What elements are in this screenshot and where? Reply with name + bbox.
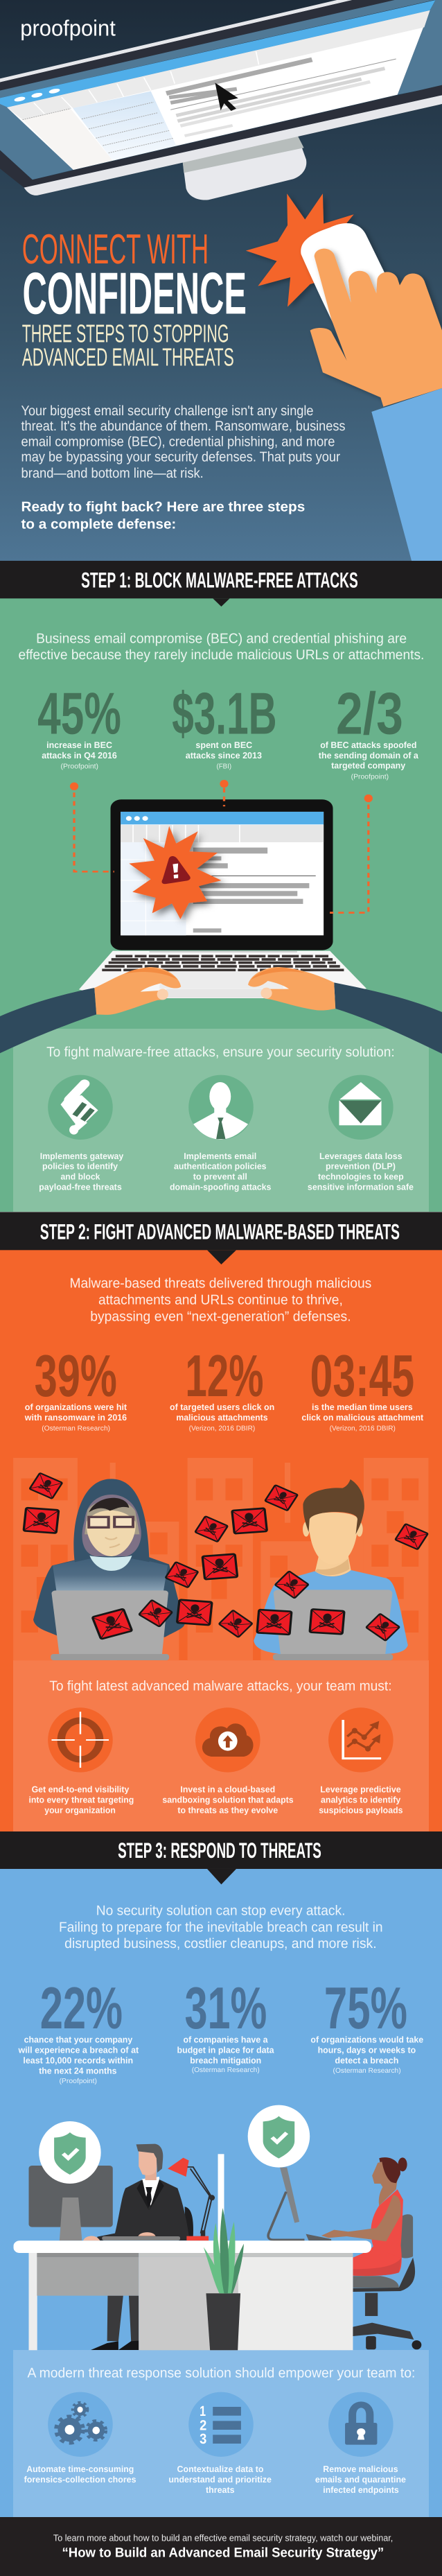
solution text 2: Invest in a cloud-based bbox=[180, 1785, 275, 1795]
stat: 31%: budget in place for data bbox=[177, 2046, 274, 2055]
stat: 12% bbox=[170, 1343, 274, 1432]
heading: step 1 band bbox=[0, 561, 442, 607]
icon: numbered list: 3 bbox=[200, 2431, 206, 2447]
stat: 22%: (Proofpoint) bbox=[59, 2077, 97, 2085]
intro paragraph: brand—and bottom line—at risk. bbox=[21, 465, 204, 480]
panel: step 2 solutions bbox=[13, 1660, 429, 1831]
stat: 03:45: (Verizon, 2016 DBIR) bbox=[330, 1425, 396, 1432]
right hand bbox=[248, 967, 442, 1054]
stat: 45%: 45% bbox=[37, 680, 121, 747]
solution text 3 bbox=[308, 1151, 414, 1192]
step 3 content bbox=[18, 1903, 423, 2085]
step 2 solutions content bbox=[48, 1678, 394, 1773]
step 2 intro: attachments and URLs continue to thrive, bbox=[98, 1292, 343, 1307]
solution text 3 bbox=[319, 1785, 403, 1816]
solution text 1 bbox=[29, 1785, 134, 1816]
call to action bbox=[21, 499, 305, 532]
icon: mouse cursor bbox=[215, 82, 238, 111]
city backdrop bbox=[13, 1458, 428, 1660]
solution text 2 bbox=[162, 1785, 294, 1816]
illustration: hacker sending malicious emails bbox=[13, 1458, 428, 1660]
icon: numbered list bbox=[188, 2392, 254, 2457]
step 2 content bbox=[24, 1275, 423, 1432]
hero text bbox=[21, 320, 345, 532]
stat: 75% bbox=[310, 1975, 423, 2074]
panel: step 3 solutions bbox=[13, 2350, 429, 2517]
malicious envelopes bbox=[24, 1473, 428, 1641]
stat: 2/3: the sending domain of a bbox=[319, 751, 418, 760]
solution text 2: authentication policies bbox=[174, 1162, 267, 1172]
solution text 1 bbox=[24, 2464, 136, 2484]
mouse bbox=[301, 223, 409, 360]
stat: 31%: (Osterman Research) bbox=[192, 2066, 260, 2073]
solution text 2: understand and prioritize bbox=[168, 2475, 272, 2484]
stat: 22%: least 10,000 records within bbox=[23, 2056, 133, 2066]
stat: 31%: 31% bbox=[185, 1975, 267, 2041]
footer text bbox=[53, 2533, 393, 2560]
stat: $3.1B: $3.1B bbox=[172, 680, 277, 747]
icon: cloud upload bbox=[195, 1707, 260, 1773]
icon: numbered list: 1 bbox=[200, 2403, 206, 2419]
logo: proofpoint bbox=[20, 16, 116, 41]
call to action: to a complete defense: bbox=[21, 516, 176, 532]
man at desk bbox=[83, 2144, 193, 2240]
stat: 12%: 12% bbox=[185, 1343, 263, 1409]
stat: 22%: 22% bbox=[40, 1975, 123, 2041]
shield badge left bbox=[39, 2121, 101, 2184]
illustration: secure office desks bbox=[14, 2105, 421, 2350]
stat: 75%: hours, days or weeks to bbox=[318, 2046, 416, 2055]
dashed connector: 2/3 bbox=[330, 794, 373, 913]
icon: padlock bbox=[328, 2392, 394, 2457]
stat: 03:45 bbox=[301, 1343, 423, 1432]
solution text 1: and block bbox=[60, 1172, 100, 1182]
stat: 22%: will experience a breach of at bbox=[18, 2046, 139, 2055]
solution text 3: sensitive information safe bbox=[308, 1183, 414, 1192]
solution text 1: your organization bbox=[44, 1806, 116, 1816]
step 1 content bbox=[18, 630, 424, 950]
step 3 intro: No security solution can stop every attack. bbox=[96, 1903, 345, 1918]
stat: 45%: increase in BEC bbox=[46, 740, 112, 750]
icon: gears bbox=[48, 2392, 113, 2457]
left monitor bbox=[29, 2166, 113, 2240]
intro paragraph: Your biggest email security challenge isn't any single bbox=[21, 403, 313, 418]
step 2 intro bbox=[70, 1275, 371, 1324]
stat: $3.1B: attacks since 2013 bbox=[186, 751, 262, 760]
icon: crosshair target bbox=[48, 1707, 113, 1773]
stat: 12%: (Verizon, 2016 DBIR) bbox=[189, 1425, 255, 1432]
woman bbox=[321, 2157, 415, 2292]
stat: 2/3: 2/3 bbox=[336, 680, 403, 747]
solution text 1: Get end-to-end visibility bbox=[32, 1785, 129, 1795]
stat: 22%: the next 24 months bbox=[39, 2066, 116, 2076]
solution text 3: Leverages data loss bbox=[319, 1151, 403, 1161]
stat: 2/3 bbox=[319, 680, 418, 781]
intro paragraph bbox=[21, 403, 345, 480]
illustration: keyboard and hands bbox=[0, 951, 442, 1054]
stat: 45%: attacks in Q4 2016 bbox=[42, 751, 117, 760]
chair base bbox=[353, 2293, 421, 2349]
title bbox=[22, 225, 247, 327]
subtitle bbox=[22, 320, 234, 372]
stat: 39%: 39% bbox=[35, 1343, 117, 1409]
subtitle: ADVANCED EMAIL THREATS bbox=[22, 343, 234, 372]
stat: $3.1B: (FBI) bbox=[216, 763, 231, 770]
title: CONNECT WITH bbox=[22, 225, 209, 272]
step 2 solution text bbox=[29, 1785, 403, 1816]
solution text 1 bbox=[39, 1151, 123, 1192]
step 1 solutions content bbox=[39, 1044, 414, 1192]
solution text 3 bbox=[315, 2464, 406, 2495]
stat: 12%: malicious attachments bbox=[176, 1413, 268, 1422]
solution text 1: Implements gateway bbox=[40, 1151, 123, 1161]
stat: 22% bbox=[18, 1975, 139, 2085]
icon: policy scroll bbox=[48, 1075, 113, 1140]
step 3 intro bbox=[59, 1903, 383, 1951]
dashed connector: 45% bbox=[70, 783, 114, 871]
step 2 intro: bypassing even “next-generation” defenses. bbox=[90, 1309, 351, 1324]
stat: 12%: of targeted users click on bbox=[170, 1402, 274, 1412]
intro paragraph: email compromise (BEC), credential phishing, and more bbox=[21, 434, 335, 449]
solution text 1: into every threat targeting bbox=[29, 1795, 134, 1805]
solution text 1: forensics-collection chores bbox=[24, 2475, 136, 2484]
dashed connector: $3.1B bbox=[220, 780, 229, 806]
icon: starburst alert bbox=[129, 826, 221, 919]
divider bbox=[218, 2154, 224, 2241]
step 1 intro bbox=[18, 630, 424, 662]
solution text 2: Implements email bbox=[184, 1151, 256, 1161]
illustration: desktop monitor bbox=[0, 0, 442, 200]
solution text 2: Contextualize data to bbox=[177, 2464, 263, 2474]
solution text 3: Remove malicious bbox=[323, 2464, 398, 2474]
call to action: Ready to fight back? Here are three steps bbox=[21, 499, 305, 514]
panel: step 1 background bbox=[0, 598, 442, 1212]
stat: 75%: detect a breach bbox=[335, 2056, 398, 2066]
stat: $3.1B bbox=[172, 680, 277, 770]
solution text 3: prevention (DLP) bbox=[326, 1162, 396, 1172]
heading: step 2 band bbox=[0, 1212, 442, 1264]
solution text 3: emails and quarantine bbox=[315, 2475, 406, 2484]
stat: 22%: chance that your company bbox=[24, 2035, 132, 2045]
stat: 39%: (Osterman Research) bbox=[42, 1425, 110, 1432]
solution text 2: to threats as they evolve bbox=[177, 1806, 278, 1816]
desk bbox=[14, 2240, 371, 2350]
stand bbox=[183, 135, 306, 200]
stat: 03:45: is the median time users bbox=[312, 1402, 413, 1412]
desk lamp bbox=[168, 2158, 215, 2240]
icon: person with tie bbox=[188, 1075, 254, 1140]
icon: numbered list: 2 bbox=[200, 2417, 206, 2433]
solution text 1: policies to identify bbox=[42, 1162, 118, 1172]
sleeve bbox=[371, 388, 442, 561]
intro paragraph: may be bypassing your security defenses. That puts your bbox=[21, 449, 340, 464]
solution text 2: sandboxing solution that adapts bbox=[162, 1795, 294, 1805]
panel: step 2 background bbox=[0, 1250, 442, 1831]
solution text 3: suspicious payloads bbox=[319, 1806, 403, 1816]
panel: hero background bbox=[0, 0, 442, 561]
stat: 45%: (Proofpoint) bbox=[60, 763, 98, 770]
solution text 2: threats bbox=[206, 2485, 235, 2495]
solution text 3: infected endpoints bbox=[323, 2485, 399, 2495]
stat: 2/3: (Proofpoint) bbox=[351, 773, 389, 781]
solution text 3: technologies to keep bbox=[318, 1172, 404, 1182]
solution text 2: domain-spoofing attacks bbox=[170, 1183, 271, 1192]
stat: 39% bbox=[24, 1343, 127, 1432]
stat: 45% bbox=[37, 680, 121, 770]
icon: trend chart bbox=[328, 1707, 394, 1773]
stat: 2/3: targeted company bbox=[331, 760, 405, 770]
panel: step 3 background bbox=[0, 1869, 442, 2517]
step 3 solutions content bbox=[24, 2365, 415, 2560]
solution text 1: payload-free threats bbox=[39, 1183, 122, 1192]
heading: step 3 band bbox=[0, 1831, 442, 1884]
solution text 2: to prevent all bbox=[193, 1172, 247, 1182]
icon: envelope bbox=[328, 1075, 394, 1140]
starburst bbox=[246, 193, 354, 307]
shield badge right bbox=[248, 2105, 310, 2168]
solution text 2 bbox=[168, 2464, 272, 2495]
stat: 31% bbox=[177, 1975, 274, 2073]
stat: 75%: (Osterman Research) bbox=[333, 2066, 401, 2074]
stat: 31%: of companies have a bbox=[183, 2035, 268, 2045]
left hand bbox=[0, 967, 181, 1053]
solution text 2 bbox=[170, 1151, 271, 1192]
office worker bbox=[254, 1479, 408, 1660]
bezel bottom bbox=[0, 85, 442, 188]
potted plant bbox=[204, 2208, 244, 2350]
hacker bbox=[33, 1479, 185, 1660]
step 2 intro: Malware-based threats delivered through malicious bbox=[70, 1275, 371, 1291]
hand bbox=[310, 249, 442, 407]
subtitle: THREE STEPS TO STOPPING bbox=[22, 320, 229, 347]
stat: 2/3: of BEC attacks spoofed bbox=[320, 740, 416, 750]
stat: 39%: of organizations were hit bbox=[25, 1402, 127, 1412]
solution text 3: analytics to identify bbox=[321, 1795, 400, 1805]
panel: footer background bbox=[0, 2517, 442, 2576]
solution text 1: Automate time-consuming bbox=[26, 2464, 134, 2474]
stat: 31%: breach mitigation bbox=[190, 2056, 261, 2066]
illustration: clicking hand bbox=[246, 193, 442, 407]
solution text 3: Leverage predictive bbox=[320, 1785, 401, 1795]
stat: $3.1B: spent on BEC bbox=[195, 740, 252, 750]
right monitor bbox=[268, 2168, 331, 2240]
panel: step 1 solutions bbox=[13, 1029, 429, 1212]
illustration: laptop with alert bbox=[111, 799, 333, 950]
stat: 39%: with ransomware in 2016 bbox=[24, 1413, 127, 1422]
